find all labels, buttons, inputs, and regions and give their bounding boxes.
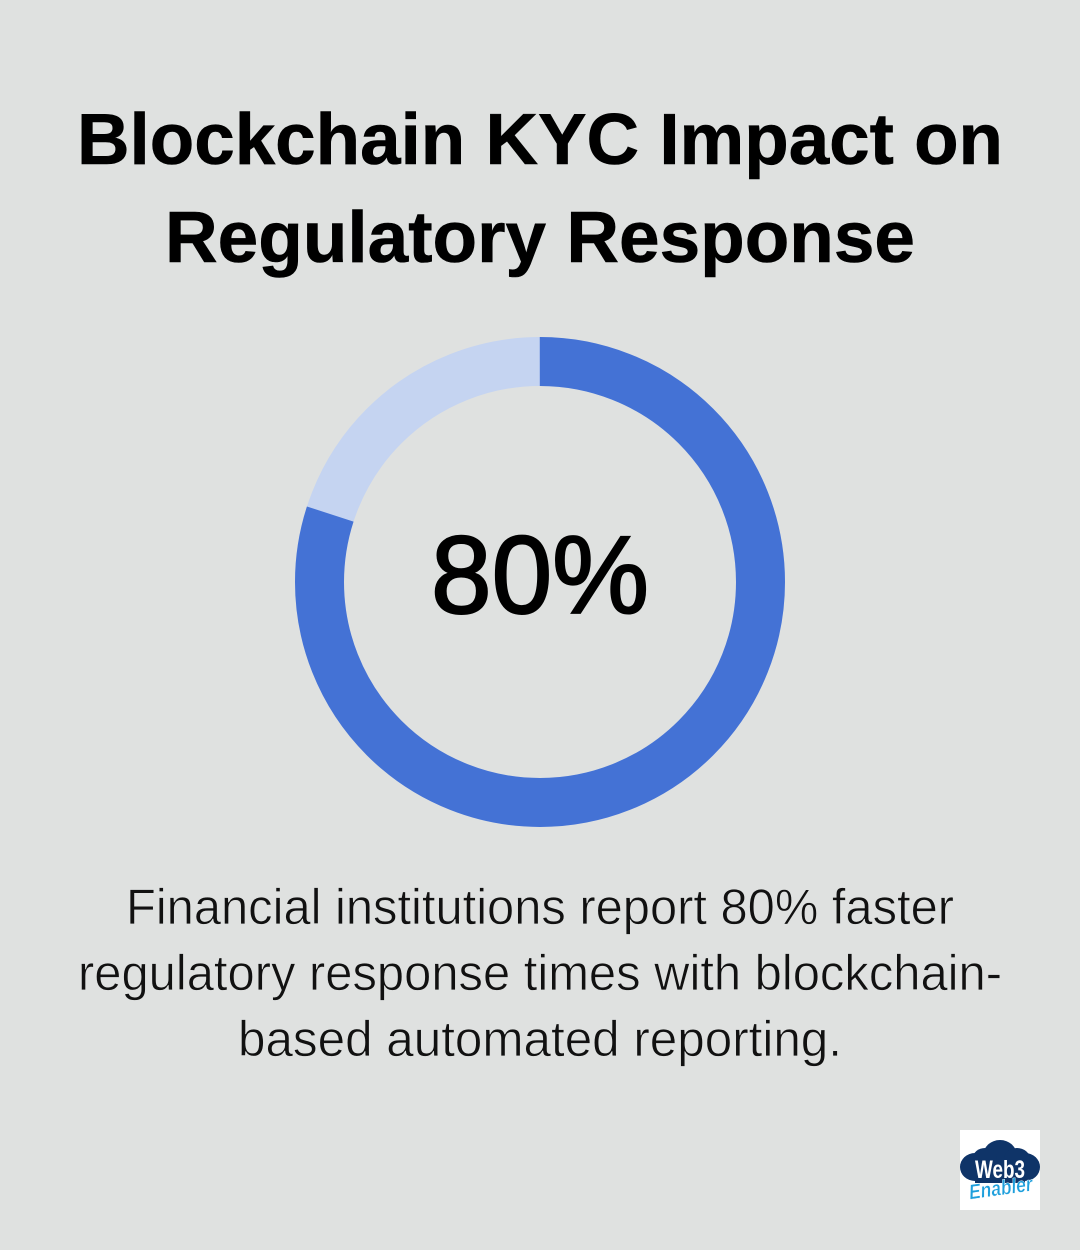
title: Blockchain KYC Impact on [77, 100, 1003, 180]
donut chart: 80% [320, 362, 760, 802]
logo: Web3 Enabler [960, 1130, 1040, 1210]
logo wordmark: Web3 [975, 1156, 1025, 1184]
title [77, 100, 1003, 278]
title: Regulatory Response [165, 198, 915, 278]
description text: regulatory response times with blockchain- [78, 945, 1002, 1001]
donut value: 80% [431, 514, 649, 637]
icon: cloud [960, 1140, 1040, 1183]
description text: Financial institutions report 80% faster [126, 879, 954, 935]
description text [78, 879, 1002, 1067]
logo script: Enabler [968, 1172, 1036, 1204]
description text: based automated reporting. [238, 1011, 842, 1067]
